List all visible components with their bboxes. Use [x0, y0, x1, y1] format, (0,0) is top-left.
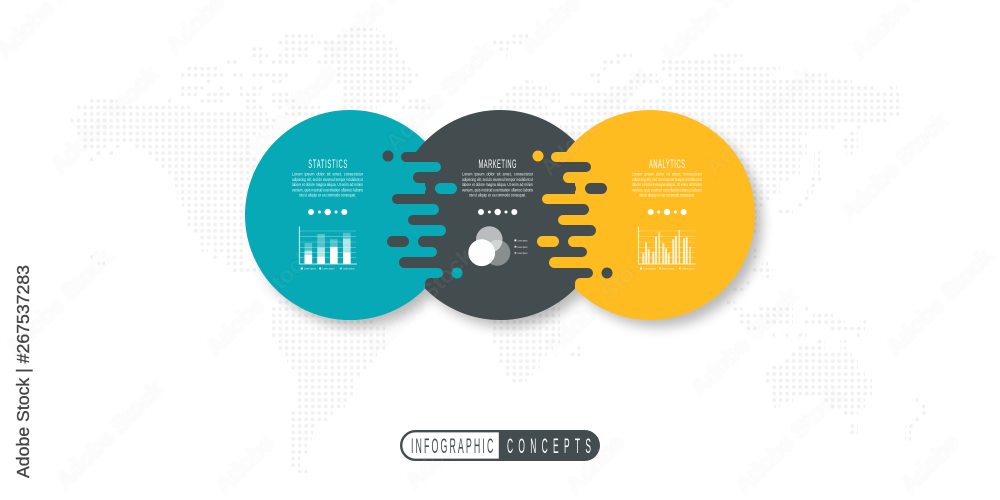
watermark: Adobe Stock [50, 376, 168, 494]
logo: infographic concepts: INFOGRAPHIC [411, 435, 494, 458]
watermark: Adobe Stock [225, 58, 343, 176]
text block: analytics [632, 172, 702, 198]
dots row [648, 209, 687, 215]
bar chart: analytics: Lorem ipsum [644, 266, 656, 270]
watermark: Adobe Stock [835, 108, 953, 226]
watermark: Adobe [895, 430, 964, 499]
watermark: Adobe [210, 430, 279, 499]
text block: analytics: labore et dolore magna aliqua. Ut enim ad minim [632, 182, 702, 187]
bar chart: statistics [299, 226, 357, 270]
drop shadows [254, 119, 762, 327]
panel: statistics [292, 158, 363, 270]
watermark: Adobe Stock [0, 243, 118, 361]
dark yellow interlock [502, 150, 612, 320]
watermark: Adobe Stock [880, 243, 998, 361]
watermark: Adobe Stock [730, 381, 848, 499]
legend: venn: Lorem ipsum [518, 238, 528, 242]
text block: analytics: adipiscing elit, sed do eiusmod tempor incididunt ut [632, 177, 702, 182]
bar chart: analytics: Lorem ipsum [682, 266, 694, 270]
heading: statistics: STATISTICS [308, 158, 347, 171]
text block: analytics: veniam, quis nostrud exercitation ullamco laboris [632, 187, 702, 192]
dotted world map [70, 30, 928, 472]
text block: marketing: nisi ut aliquip ex ea commodo consequat. [469, 193, 526, 198]
bar chart: statistics: Lorem ipsum [304, 266, 316, 270]
panel: analytics [632, 158, 702, 270]
panel: circle shapes with interlocking bars [245, 110, 755, 320]
watermark: Adobe Stock [45, 61, 163, 179]
legend: venn: Lorem ipsum [518, 251, 528, 255]
watermark: Adobe Stock [700, 63, 818, 181]
teal circle [245, 110, 455, 320]
watermark: Adobe Stock [360, 243, 478, 361]
logo: infographic concepts [401, 430, 600, 461]
text block: statistics: adipiscing elit, sed do eiusmod tempor incididunt ut [292, 177, 363, 182]
heading: analytics: ANALYTICS [649, 158, 685, 171]
watermark: Adobe Stock [685, 283, 803, 401]
watermark: Adobe [560, 430, 629, 499]
bar chart: analytics: Lorem ipsum [662, 266, 674, 270]
text block: statistics [292, 172, 363, 198]
dots row [478, 209, 517, 215]
text block: marketing [462, 172, 533, 198]
text block: statistics: nisi ut aliquip ex ea commodo consequat. [299, 193, 356, 198]
text block: analytics: nisi ut aliquip ex ea commodo consequat. [639, 193, 695, 198]
side stock id text: Adobe Stock | #267537283 [13, 265, 33, 478]
text block: statistics: veniam, quis nostrud exercitation ullamco laboris [292, 187, 363, 192]
dark circle [395, 110, 605, 320]
panel: marketing [462, 158, 533, 266]
text block: marketing: veniam, quis nostrud exercitation ullamco laboris [462, 187, 533, 192]
bar chart: statistics: Lorem ipsum [343, 266, 354, 270]
watermark: Adobe Stock [540, 243, 658, 361]
bar chart: analytics [638, 226, 696, 270]
bar chart: statistics: Lorem ipsum [322, 266, 334, 270]
text block: marketing: labore et dolore magna aliqua. Ut enim ad minim [462, 182, 533, 187]
yellow circle [545, 110, 755, 320]
venn diagram [468, 226, 510, 266]
legend: venn: Lorem ipsum [518, 245, 528, 249]
teal dark interlock [300, 150, 462, 320]
legend: venn [514, 238, 528, 255]
heading: marketing: MARKETING [478, 158, 516, 171]
text block: statistics: Lorem ipsum dolor sit amet, consectetur [292, 172, 363, 176]
text block: marketing: adipiscing elit, sed do eiusmod tempor incididunt ut [462, 177, 533, 182]
watermark: Adobe [400, 425, 469, 494]
watermark: Adobe Stock [535, 63, 653, 181]
watermark: Adobe Stock [380, 38, 498, 156]
text block: marketing: Lorem ipsum dolor sit amet, consectetur [462, 172, 533, 176]
dots row [308, 209, 347, 215]
watermark: Adobe Stock [200, 243, 318, 361]
text block: statistics: labore et dolore magna aliqua. Ut enim ad minim [292, 182, 363, 187]
logo: infographic concepts: CONCEPTS [507, 436, 591, 458]
text block: analytics: Lorem ipsum dolor sit amet, consectetur [632, 172, 702, 176]
